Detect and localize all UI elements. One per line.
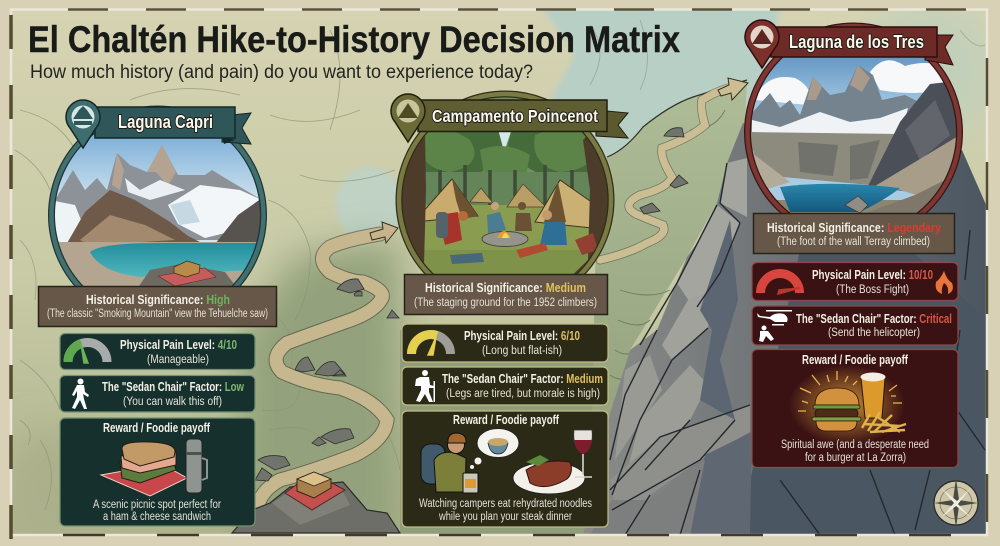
map pin: [391, 94, 425, 142]
banner: [418, 100, 628, 138]
card: reward: [752, 350, 958, 468]
icon: thermos: [186, 439, 207, 493]
card: reward: Reward / Foodie payoff: [103, 421, 211, 435]
scene: forest camp: [402, 98, 608, 274]
mountain massif: [583, 123, 987, 535]
arrow to Campamento Poincenot: [370, 222, 398, 243]
card: reward: while you plan your steak dinner: [438, 511, 572, 523]
scene: Laguna Capri view: [55, 134, 260, 286]
ring: [748, 26, 960, 238]
card: reward: [402, 411, 608, 527]
trail segment to Campamento Poincenot: [257, 234, 387, 512]
card: reward: A scenic picnic spot perfect for: [93, 499, 221, 511]
card: physical pain: (The Boss Fight): [836, 284, 909, 296]
icon: steak dinner: [513, 455, 585, 494]
trail segment to Laguna de los Tres: [600, 88, 728, 260]
icon: wine glass: [574, 430, 592, 477]
icon: helicopter rescue: [757, 310, 792, 342]
card: reward: a ham & cheese sandwich: [103, 511, 211, 523]
card: physical pain: [752, 262, 958, 300]
card: physical pain: Physical Pain Level: 10/10: [812, 268, 933, 282]
card: sedan chair factor: The "Sedan Chair" Factor: Medium: [442, 372, 603, 386]
icon: flame: [936, 271, 953, 294]
card: reward: for a burger at La Zorra): [805, 452, 906, 464]
plank: historical significance: Historical Significance: Legendary: [767, 221, 941, 235]
icon: burger: [812, 388, 861, 431]
card: reward: Watching campers eat rehydrated noodles: [419, 498, 592, 510]
icon: thought bubble with noodles: [470, 428, 519, 469]
card: reward: [60, 418, 255, 526]
gauge 4/10: [68, 342, 107, 363]
card: physical pain: (Manageable): [147, 354, 209, 366]
icon: fries: [862, 412, 906, 432]
title: El Chaltén Hike-to-History Decision Matrix: [28, 18, 680, 60]
plank: historical significance: [404, 274, 608, 314]
card: reward: Reward / Foodie payoff: [802, 353, 909, 367]
card: sedan chair factor: [752, 306, 958, 345]
plank: historical significance: Historical Significance: High: [86, 293, 230, 307]
card: physical pain: [60, 334, 255, 370]
panel: Laguna Capri: [38, 100, 276, 526]
ring: [399, 94, 611, 306]
icon: burger glow: [789, 365, 905, 445]
card: sedan chair factor: (Send the helicopter): [828, 327, 920, 339]
card: sedan chair factor: [60, 376, 255, 412]
gauge 6/10: [412, 334, 450, 355]
banner: [95, 107, 251, 144]
banner: [771, 27, 953, 65]
icon: walker: [72, 378, 89, 409]
panel: Campamento Poincenot: [391, 90, 628, 527]
banner: Laguna de los Tres: [789, 32, 924, 52]
card: sedan chair factor: [402, 367, 608, 405]
subtitle: How much history (and pain) do you want to experience today?: [30, 62, 533, 83]
panel: Laguna de los Tres: [745, 20, 965, 468]
plank: historical significance: [38, 286, 276, 326]
card: sedan chair factor: (You can walk this off): [123, 396, 222, 408]
plank: historical significance: Historical Significance: Medium: [425, 281, 586, 295]
icon: sandwich on blanket: [101, 442, 187, 496]
card: sedan chair factor: The "Sedan Chair" Factor: Low: [102, 380, 244, 394]
icon: hiker eating noodles: [421, 433, 478, 493]
plank: historical significance: (The staging ground for the 1952 climbers): [414, 297, 597, 309]
arrow to Laguna de los Tres: [718, 78, 748, 100]
icon: glow rays: [798, 371, 902, 411]
card: physical pain: [402, 324, 608, 362]
card: reward: Reward / Foodie payoff: [453, 413, 560, 427]
plank: historical significance: (The foot of the wall Terray climbed): [777, 236, 930, 248]
icon: beer: [860, 372, 886, 418]
ring: [52, 109, 264, 321]
icon: hiker: [415, 370, 435, 402]
card: sedan chair factor: (Legs are tired, but morale is high): [446, 388, 600, 400]
gauge 10/10: [760, 274, 800, 294]
plank: historical significance: (The classic "Smoking Mountain" view the Tehuelche saw): [47, 308, 268, 320]
card: sedan chair factor: The "Sedan Chair" Factor: Critical: [796, 312, 952, 326]
scene: glacial lagoon: [751, 58, 956, 213]
banner: Campamento Poincenot: [432, 106, 598, 126]
map pin: [745, 20, 779, 68]
rocks and picnic on trail: [232, 128, 688, 533]
banner: Laguna Capri: [118, 112, 213, 132]
card: physical pain: (Long but flat-ish): [482, 345, 562, 357]
icon: compass rose: [934, 478, 978, 528]
card: reward: Spiritual awe (and a desperate need: [781, 439, 929, 451]
plank: historical significance: [754, 214, 954, 254]
card: physical pain: Physical Pain Level: 6/10: [464, 329, 580, 343]
map pin: [66, 100, 100, 148]
card: physical pain: Physical Pain Level: 4/10: [120, 338, 237, 352]
